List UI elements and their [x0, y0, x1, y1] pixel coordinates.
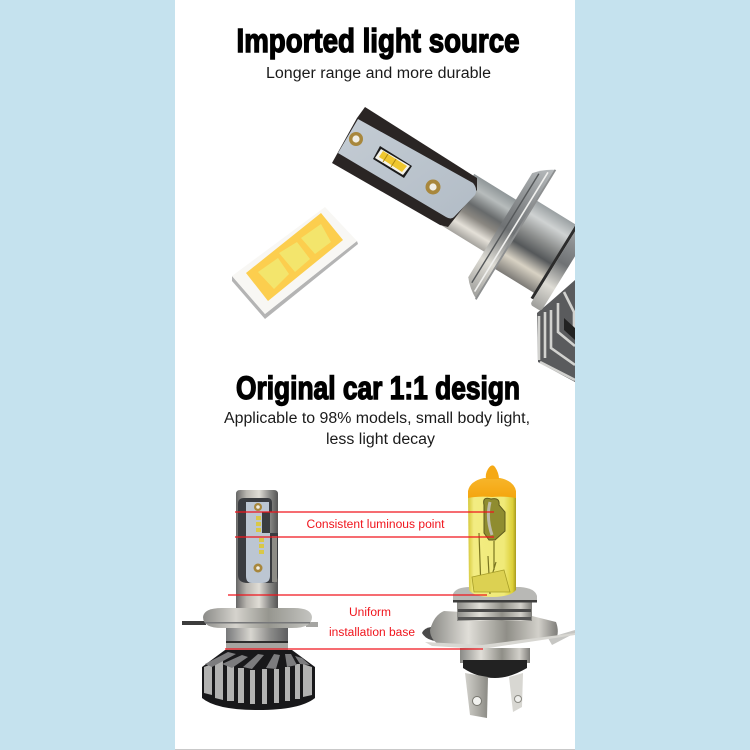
label: consistent luminous point: Consistent luminous point [306, 519, 445, 531]
chip white substrate [232, 207, 357, 314]
orange cap [468, 478, 516, 498]
left dark tab [422, 627, 436, 641]
chip orange phosphor [246, 213, 343, 301]
title: imported light source: Imported light source [236, 22, 520, 59]
mounting screws [349, 132, 440, 194]
LED chip close-up [232, 207, 358, 319]
rear collar [530, 226, 575, 300]
metal tube [236, 490, 278, 610]
orange nib [486, 465, 499, 479]
screws [254, 503, 262, 572]
H4 LED bulb [182, 490, 318, 710]
chip side edge [232, 241, 358, 319]
flange band [468, 170, 554, 300]
black heatsink body [332, 107, 477, 227]
lower socket [460, 648, 530, 663]
subtitle: applicable models: Applicable to 98% models, small body light, [224, 410, 530, 427]
H7 LED bulb [332, 107, 575, 382]
heat sink [202, 650, 315, 710]
bottom edge [175, 749, 575, 750]
upper socket [457, 601, 532, 621]
small LED module [373, 146, 412, 178]
flange grooves [472, 174, 539, 283]
silver circuit plate [338, 119, 476, 218]
tube side highlight [272, 536, 277, 582]
comparison lines [225, 512, 494, 649]
halogen H4 bulb [422, 465, 575, 718]
metal flange [430, 611, 558, 645]
LED circuit plate [246, 502, 270, 583]
chip yellow emitters [258, 224, 331, 289]
subtitle second line: less light decay [326, 431, 435, 448]
filament and wires [472, 498, 510, 594]
glass envelope [468, 494, 516, 597]
title: original car design: Original car 1:1 design [236, 370, 520, 406]
subtitle: longer range: Longer range and more durable [266, 65, 491, 82]
left prong [465, 673, 488, 718]
heat sink fins [537, 280, 575, 382]
flange lower lip [425, 633, 575, 649]
flange [203, 608, 312, 628]
label: installation base: installation base [329, 627, 415, 639]
collar [453, 587, 537, 602]
right tab [548, 630, 575, 645]
right prong [509, 673, 523, 712]
tube window [238, 498, 278, 583]
rear barrel [492, 199, 577, 293]
front barrel [442, 174, 518, 253]
neck [226, 628, 288, 642]
label: uniform: Uniform [349, 607, 391, 619]
white central panel [175, 0, 575, 750]
black base ring [463, 660, 527, 678]
LED chips [256, 516, 264, 554]
locating tabs [182, 621, 206, 625]
